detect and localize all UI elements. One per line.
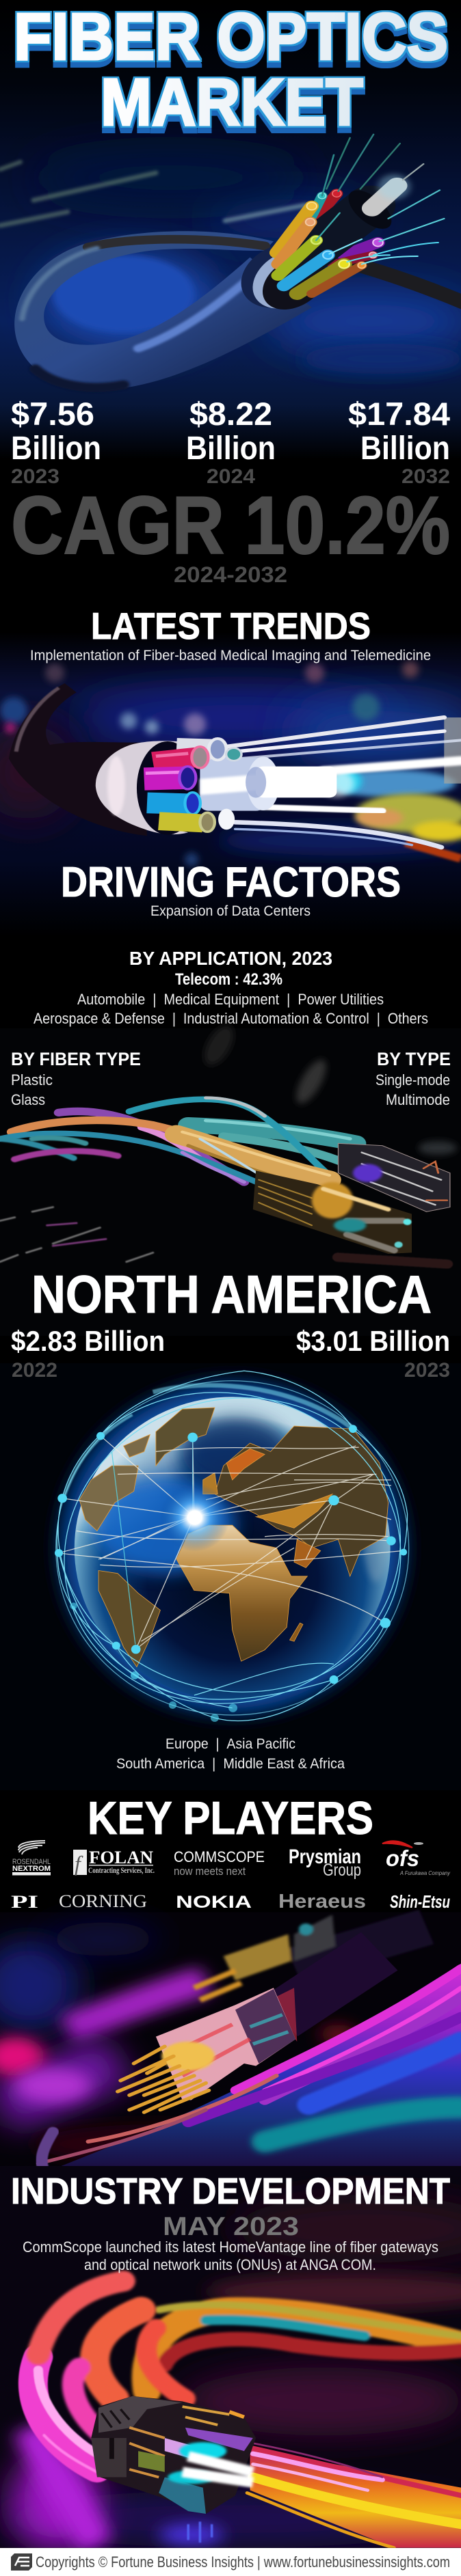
text block: by fiber type: Glass	[11, 1091, 45, 1108]
heading: latest trends: Implementation of Fiber-based Medical Imaging and Telemedicine	[30, 648, 431, 663]
outgoing rays	[247, 2443, 461, 2548]
Arabia	[294, 1539, 321, 1567]
lower gold connector	[253, 1170, 412, 1254]
coloured tubes	[312, 193, 378, 264]
text block: other regions	[116, 1736, 345, 1772]
stat: north america 2022	[11, 1325, 165, 1382]
text block: by application: Telecom : 42.3%	[175, 970, 282, 989]
stat: north america 2023	[296, 1325, 450, 1382]
text block: other regions: Europe | Asia Pacific	[166, 1736, 295, 1752]
icon: network globe	[47, 1369, 419, 1727]
Eurasia	[215, 1426, 388, 1576]
network nodes	[55, 1425, 407, 1722]
stat: 2024	[186, 396, 276, 488]
stat: 2023	[11, 396, 101, 488]
stat: 2032: 2032	[401, 465, 450, 488]
logo: Rosendahl Nextrom: ROSENDAHL	[12, 1858, 51, 1866]
logo: Folan: Contracting Services, Inc.	[88, 1867, 155, 1875]
rear cable	[347, 262, 461, 303]
logo: Rosendahl Nextrom: NEXTROM	[12, 1865, 51, 1873]
front cable	[279, 1951, 380, 2017]
logo: Folan	[73, 1848, 155, 1876]
cable loop	[14, 231, 312, 389]
logo: Corning: CORNING	[59, 1891, 147, 1911]
Greenland	[156, 1408, 215, 1466]
stat: 2023: Billion	[11, 430, 101, 467]
heading: industry development: MAY 2023	[163, 2212, 299, 2241]
connector background	[0, 1913, 461, 2173]
icon: purple wire bundle	[38, 1964, 461, 2173]
text block: by application	[34, 948, 428, 1027]
heading: driving factors: Expansion of Data Centers	[150, 903, 311, 919]
text block: by fiber type	[11, 1049, 141, 1108]
reflected specks	[0, 1207, 447, 1264]
icon: rainbow fibre strands	[33, 2281, 461, 2548]
North America	[79, 1466, 138, 1531]
development background	[0, 2166, 461, 2551]
logo: OFS	[382, 1841, 451, 1876]
heading: key players: KEY PLAYERS	[88, 1792, 373, 1844]
logo: CommScope: COMMSCOPE	[174, 1848, 265, 1865]
trends background	[0, 632, 461, 936]
text block: by application: Automobile | Medical Equipment | Power Utilities	[77, 991, 384, 1008]
inner loop glow	[53, 255, 194, 333]
logo: Rosendahl Nextrom	[12, 1841, 51, 1875]
logo: Nokia: NOKIA	[176, 1893, 252, 1912]
stat: 2023: 2023	[11, 465, 60, 488]
metal collar	[225, 232, 343, 324]
orbits	[12, 1345, 453, 1756]
logo: Prysmian Group: Prysmian	[289, 1846, 361, 1868]
text block: by type	[376, 1049, 451, 1108]
logo: OFS: ofs	[386, 1846, 419, 1871]
CAGR callout: 2024-2032	[174, 562, 287, 587]
title: MARKET	[101, 65, 363, 139]
South America	[98, 1571, 160, 1667]
stat: north america 2023: $3.01 Billion	[296, 1325, 450, 1357]
footer	[0, 2548, 461, 2576]
connector housing	[91, 2396, 256, 2514]
text block: other regions: South America | Middle East & Africa	[116, 1756, 345, 1772]
stat: 2032	[348, 396, 450, 488]
icon: fortune business insights logo	[11, 2553, 32, 2571]
light rays	[224, 717, 461, 847]
gold pins	[118, 2046, 209, 2112]
heading: industry development	[11, 2171, 450, 2241]
stat: 2024: Billion	[186, 430, 276, 467]
stat: north america 2022: $2.83 Billion	[11, 1325, 165, 1357]
globe background	[0, 1363, 461, 1790]
heading: latest trends	[30, 605, 431, 663]
collar	[96, 741, 198, 835]
panel: connector image	[0, 1913, 461, 2173]
cyan glow	[179, 2442, 226, 2460]
panel: globe image	[43, 1365, 421, 1730]
text block: by type: BY TYPE	[377, 1049, 451, 1069]
tubes	[144, 739, 241, 832]
black core	[309, 174, 410, 253]
Madagascar	[290, 1623, 303, 1641]
text block: by application: Aerospace & Defense | Industrial Automation & Control | Others	[34, 1010, 428, 1027]
stat: 2032: Billion	[360, 430, 450, 467]
text block: by type: Multimode	[386, 1091, 450, 1108]
logo: OFS: A Furukawa Company	[399, 1870, 451, 1876]
icon: glowing connector	[91, 2396, 256, 2543]
panel: industry development image	[0, 2166, 461, 2551]
stat: north america 2023: 2023	[404, 1359, 450, 1382]
central flare	[159, 1483, 230, 1552]
sphere shading	[42, 1375, 397, 1582]
logo: CommScope	[174, 1848, 265, 1878]
core glass	[200, 756, 354, 811]
thin fibres	[316, 135, 444, 264]
blurred rear connector	[194, 1915, 427, 2000]
jacket	[9, 683, 147, 836]
market size stats	[11, 396, 450, 488]
logo: Folan: f	[75, 1851, 83, 1876]
text block: by fiber type: BY FIBER TYPE	[11, 1049, 141, 1069]
chords	[59, 1436, 403, 1649]
logo: Folan: FOLAN	[89, 1848, 153, 1867]
ribbons	[0, 1098, 356, 1198]
heading: driving factors: DRIVING FACTORS	[61, 859, 401, 906]
panel: market overview hero	[0, 0, 461, 459]
glow	[41, 1364, 423, 1732]
text block: commscope news	[23, 2238, 438, 2273]
Britain	[203, 1472, 218, 1494]
front tubes	[276, 190, 383, 294]
logo: Prysmian Group	[289, 1846, 361, 1880]
connector body	[156, 1988, 295, 2100]
icon: coloured wires and connectors	[0, 1098, 450, 1264]
stat: 2024: 2024	[207, 465, 255, 488]
stat: 2024: $8.22	[189, 396, 272, 432]
logos: key players	[11, 1841, 451, 1913]
left strand	[33, 2281, 124, 2472]
upper glass connector	[338, 1143, 450, 1211]
sphere	[75, 1397, 391, 1700]
text block: by type: Single-mode	[376, 1071, 450, 1088]
title	[14, 0, 448, 139]
hero background	[0, 0, 461, 459]
heading: latest trends: LATEST TRENDS	[91, 605, 371, 647]
icon: fibre bundle with glowing core	[9, 683, 461, 859]
continents	[79, 1408, 388, 1667]
text block: by application: BY APPLICATION, 2023	[129, 948, 332, 969]
Africa	[176, 1525, 307, 1661]
wires background	[0, 1021, 461, 1336]
rear light band	[146, 2305, 461, 2391]
stat: 2023: $7.56	[11, 396, 94, 432]
logo: CommScope: now meets next	[174, 1865, 246, 1878]
panel: fibre wires image	[0, 1021, 461, 1336]
stat: 2032: $17.84	[348, 396, 450, 432]
colour field right	[326, 717, 461, 859]
stat: north america 2022: 2022	[12, 1359, 57, 1382]
middle strand	[73, 2310, 185, 2433]
icon: network connector	[118, 1915, 427, 2112]
light streaks	[0, 162, 306, 225]
logo: Prysmian Group: Group	[323, 1861, 361, 1880]
icon: fiber optic cable	[14, 135, 461, 389]
logo: PI: PI	[11, 1892, 38, 1912]
panel: latest trends image	[0, 632, 461, 936]
text block: by fiber type: Plastic	[11, 1071, 53, 1088]
logo: Heraeus: Heraeus	[278, 1891, 366, 1913]
text block: commscope news: and optical network units (ONUs) at ANGA COM.	[84, 2256, 376, 2273]
